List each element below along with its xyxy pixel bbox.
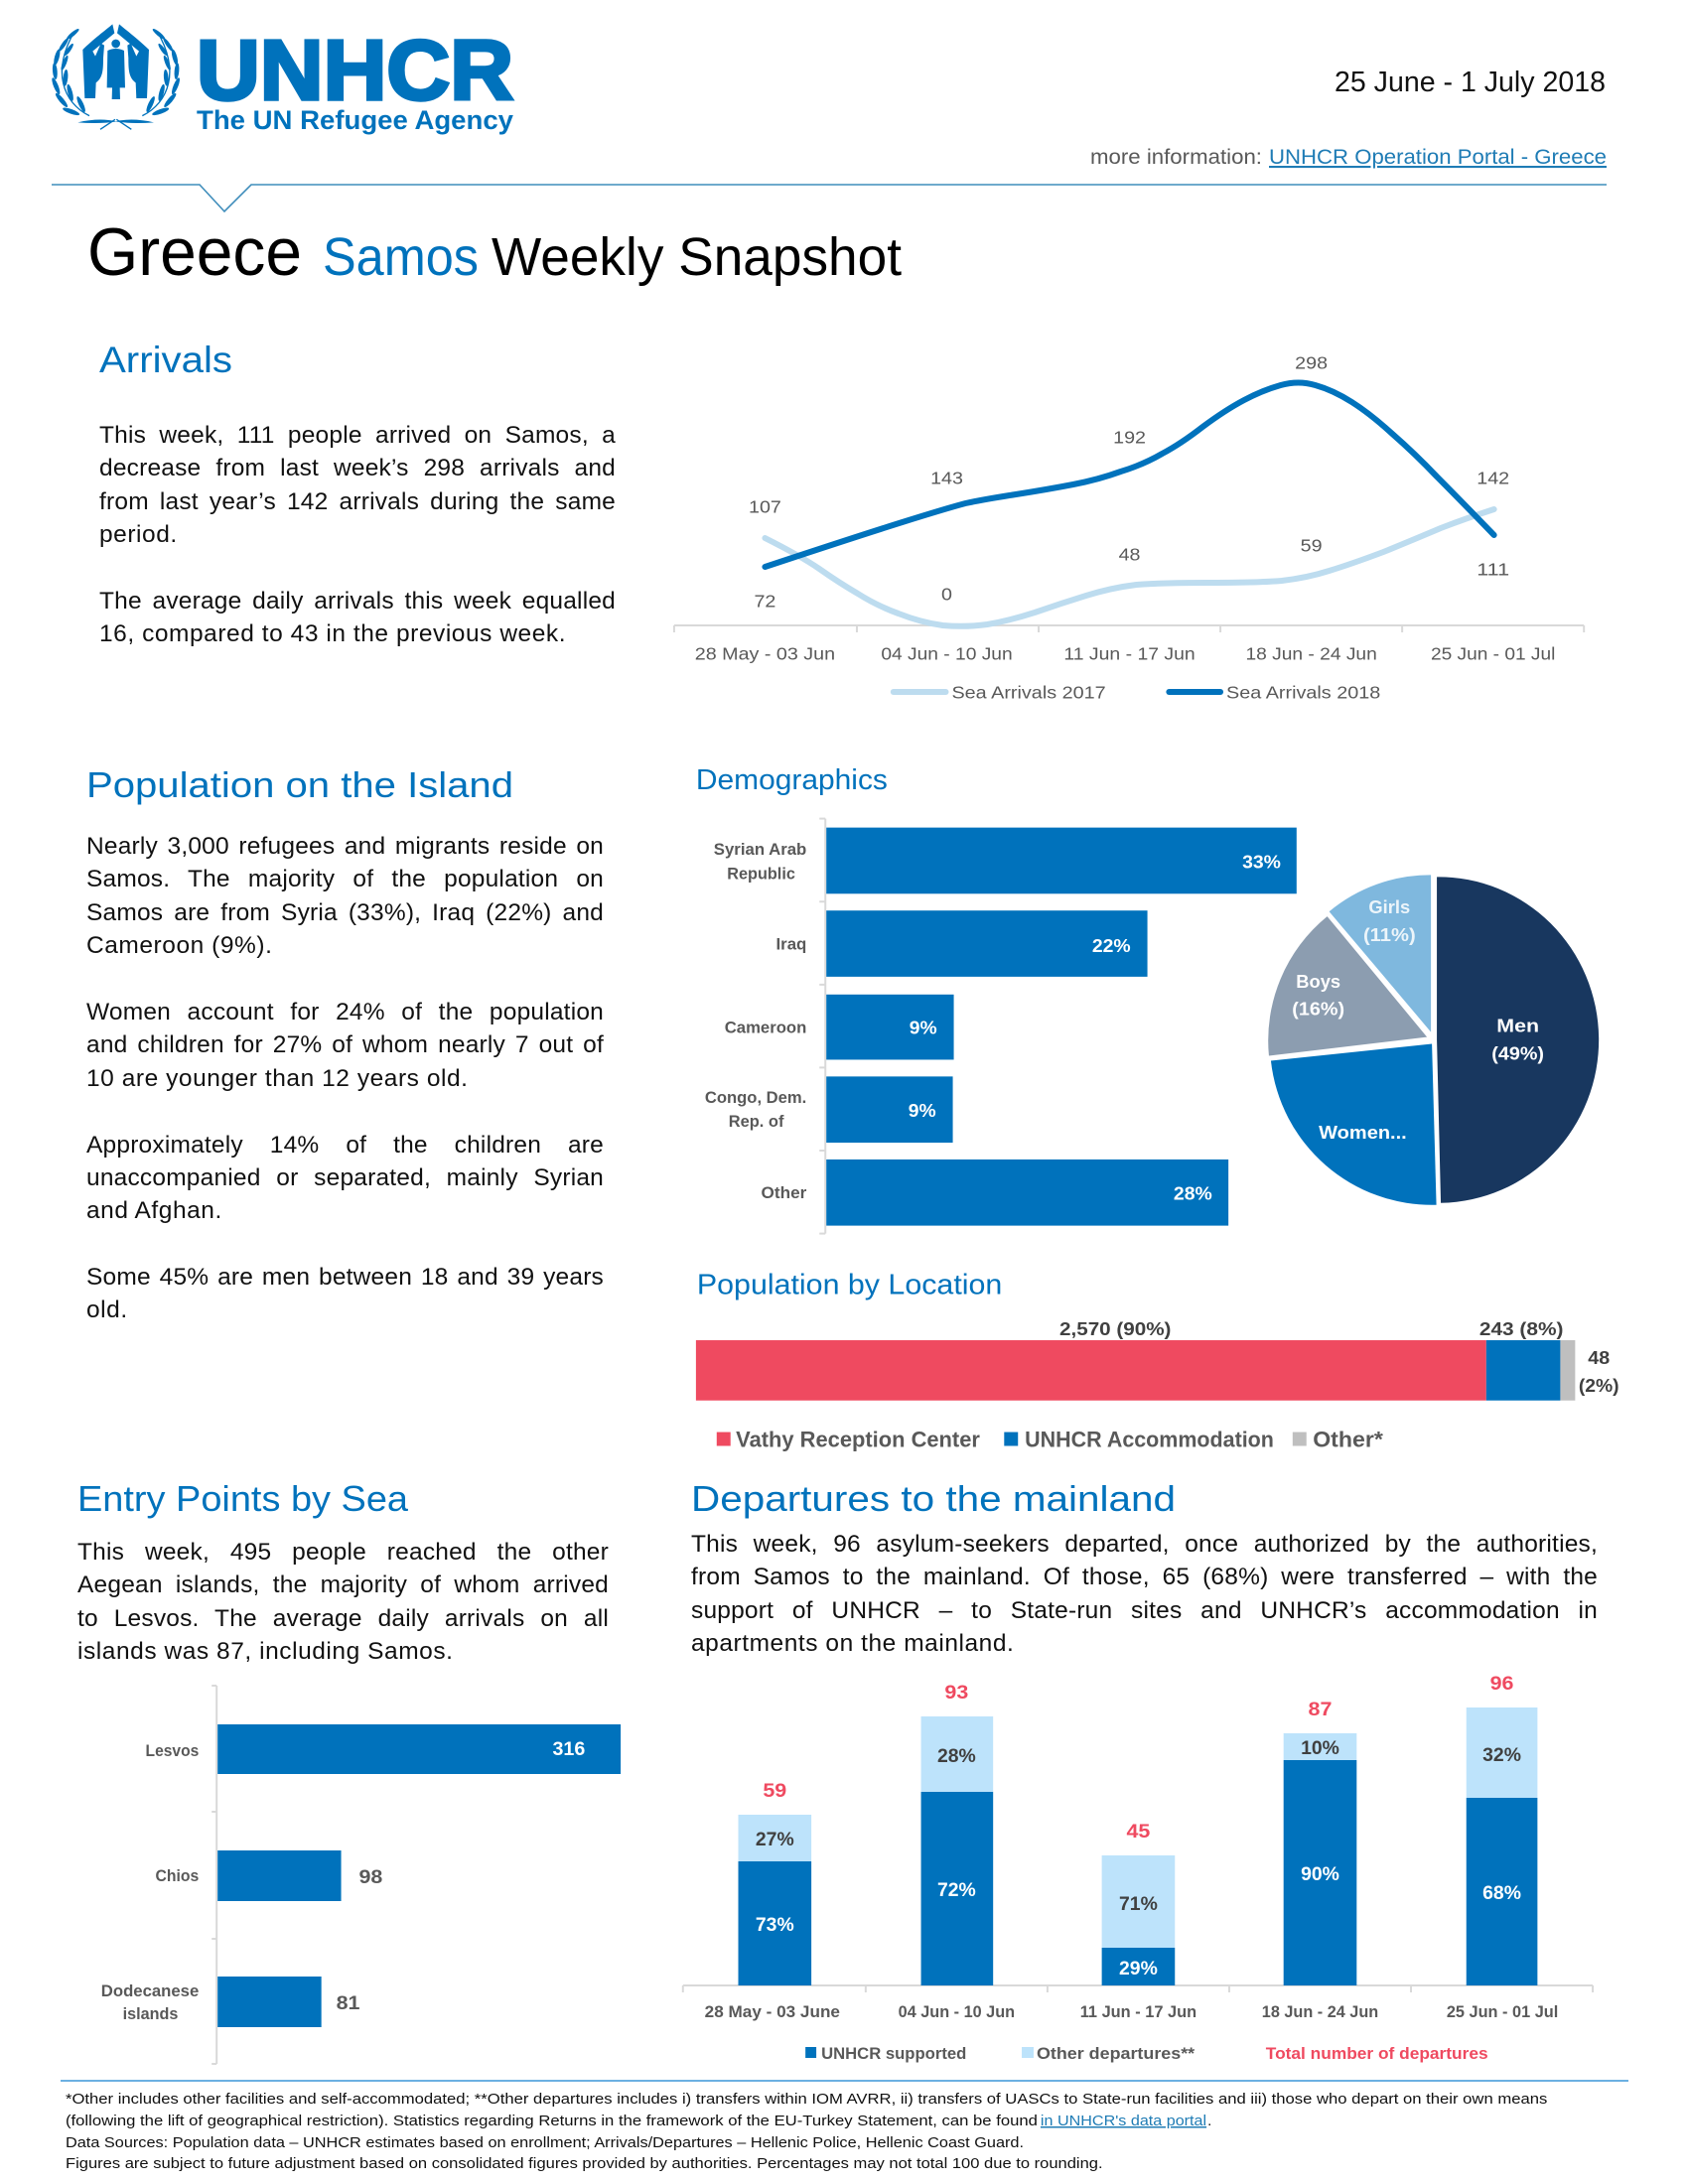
category labels: Congo, Dem. <box>705 1088 806 1107</box>
wedge: Boys <box>1268 916 1427 1055</box>
more information link <box>1090 146 1607 169</box>
value labels <box>337 1739 585 2014</box>
bar chart: entry points <box>101 1686 621 2064</box>
stacked column chart: departures <box>683 1674 1593 2063</box>
stacked bar labels: 2,570 (90%) <box>1059 1319 1171 1340</box>
category labels: Iraq <box>775 935 806 954</box>
logo tagline: The UN Refugee Agency <box>197 105 513 135</box>
footnotes: Figures are subject to future adjustment based on consolidated figures provided by authorities. Percentages may not total 100 due to rounding. <box>66 2155 1103 2172</box>
totals: 45 <box>1126 1822 1150 1843</box>
pie labels: Men <box>1496 1017 1539 1037</box>
totals <box>763 1674 1513 1843</box>
island labels: Dodecanese <box>101 1981 199 2000</box>
bar chart: nationality <box>705 819 1297 1234</box>
pie labels: Women... <box>1319 1123 1407 1144</box>
legend: Total number of departures <box>1266 2044 1488 2063</box>
title: Weekly Snapshot <box>492 227 902 287</box>
legend: UNHCR supported <box>821 2044 966 2063</box>
category labels: Syrian Arab <box>714 840 806 859</box>
other departures columns <box>739 1707 1537 1948</box>
value labels <box>909 852 1281 1205</box>
data labels: 72 <box>754 591 775 612</box>
data labels: 59 <box>1301 535 1323 556</box>
wedge: Men <box>1437 877 1599 1203</box>
x-axis labels: 28 May - 03 Jun <box>695 643 835 664</box>
data labels <box>749 352 1509 612</box>
x-axis labels: 28 May - 03 June <box>705 2003 840 2021</box>
text block: population on the island: unaccompanied or separated, mainly Syrian <box>86 1164 604 1191</box>
totals: 59 <box>763 1781 786 1802</box>
value labels: 33% <box>1242 852 1281 873</box>
title: Greece <box>87 214 302 290</box>
value labels: 81 <box>337 1993 359 2014</box>
text block: population on the island: old. <box>86 1297 128 1323</box>
legend <box>805 2044 1488 2063</box>
text block: population on the island: and Afghan. <box>86 1197 222 1224</box>
UNHCR supported columns <box>739 1760 1537 1985</box>
text block: population on the island: Samos are from Syria (33%), Iraq (22%) and <box>86 899 604 926</box>
percentage labels: 28% <box>937 1746 976 1767</box>
heading: Departures to the mainland: Departures to the mainland <box>691 1478 1176 1519</box>
data labels: 107 <box>749 496 781 517</box>
legend: Other departures** <box>1037 2044 1196 2063</box>
heading: Entry Points by Sea: Entry Points by Sea <box>77 1478 409 1519</box>
text block: entry points: to Lesvos. The average daily arrivals on all <box>77 1605 609 1632</box>
x-axis labels: 04 Jun - 10 Jun <box>899 2003 1015 2021</box>
series: Sea Arrivals 2017 <box>765 509 1494 626</box>
text block: population on the island: 10 are younger than 12 years old. <box>86 1065 469 1092</box>
logo: UNHCR <box>51 24 513 135</box>
footnotes: . <box>1207 2113 1211 2129</box>
pie labels: (11%) <box>1363 925 1416 946</box>
legend: Vathy Reception Center <box>736 1427 980 1451</box>
text block: departures: This week, 96 asylum-seekers departed, once authorized by the authorities, <box>691 1531 1598 1558</box>
percentage labels: 90% <box>1301 1864 1339 1885</box>
text block: entry points <box>77 1539 609 1665</box>
x-axis labels <box>705 2003 1558 2021</box>
percentage labels: 32% <box>1482 1745 1521 1766</box>
category labels: Rep. of <box>729 1112 784 1131</box>
text block: entry points: This week, 495 people reached the other <box>77 1539 609 1566</box>
data labels: 142 <box>1477 468 1509 488</box>
category labels <box>705 840 807 1202</box>
text block: departures: from Samos to the mainland. Of those, 65 (68%) were transferred – with the <box>691 1564 1598 1590</box>
text block: arrivals: The average daily arrivals this week equalled <box>99 588 616 614</box>
text block: departures <box>691 1531 1598 1657</box>
percentage labels <box>756 1738 1521 1979</box>
pie labels <box>1292 897 1544 1144</box>
x-axis labels: 25 Jun - 01 Jul <box>1447 2003 1558 2021</box>
footnotes: in UNHCR's data portal <box>1041 2113 1206 2129</box>
legend: Sea Arrivals 2018 <box>1226 682 1380 703</box>
value labels: 28% <box>1174 1184 1212 1205</box>
x-axis labels: 18 Jun - 24 Jun <box>1262 2003 1378 2021</box>
text block: arrivals: decrease from last week’s 298 arrivals and <box>99 455 616 481</box>
wedge: Girls <box>1330 875 1431 1032</box>
pie chart: sex and age <box>1268 875 1599 1205</box>
value labels: 22% <box>1092 936 1131 957</box>
title: Samos <box>323 227 479 287</box>
text block: population on the island: Cameroon (9%). <box>86 932 272 959</box>
text block: population on the island: and children for 27% of whom nearly 7 out of <box>86 1031 604 1058</box>
text block: arrivals <box>99 422 616 647</box>
text block: entry points: Aegean islands, the majority of whom arrived <box>77 1571 609 1598</box>
island labels: islands <box>123 2004 178 2023</box>
text block: entry points: islands was 87, including Samos. <box>77 1638 453 1665</box>
x-axis labels: 04 Jun - 10 Jun <box>881 643 1013 664</box>
island labels: Lesvos <box>146 1741 199 1760</box>
legend <box>717 1427 1383 1451</box>
data labels: 0 <box>941 584 952 605</box>
totals: 96 <box>1490 1674 1513 1695</box>
more information link: UNHCR Operation Portal - Greece <box>1269 146 1607 169</box>
stacked bar labels: 243 (8%) <box>1479 1319 1563 1340</box>
icon: UNHCR emblem with laurel wreath and sheltering hands <box>51 24 182 129</box>
text block: population on the island <box>86 833 604 1323</box>
text block: population on the island: Samos. The majority of the population on <box>86 866 604 892</box>
legend <box>894 682 1380 703</box>
line chart: sea arrivals 2017 vs 2018 <box>674 352 1584 703</box>
percentage labels: 72% <box>937 1880 976 1901</box>
legend: Sea Arrivals 2017 <box>951 682 1106 703</box>
stacked bar labels: 48 <box>1588 1348 1610 1369</box>
value labels: 9% <box>910 1019 937 1039</box>
percentage labels: 71% <box>1119 1894 1158 1915</box>
percentage labels: 27% <box>756 1830 794 1850</box>
stacked bar: population by location <box>696 1319 1619 1451</box>
title <box>87 214 902 290</box>
text block: population on the island: Women account for 24% of the population <box>86 999 604 1025</box>
data labels: 298 <box>1295 352 1328 373</box>
date range: 25 June - 1 July 2018 <box>1335 67 1606 98</box>
footnotes <box>66 2091 1547 2172</box>
pie labels: Girls <box>1368 897 1410 918</box>
text block: arrivals: from last year’s 142 arrivals during the same <box>99 488 616 515</box>
stacked bar labels: (2%) <box>1579 1376 1619 1397</box>
pie labels: (16%) <box>1292 1000 1344 1021</box>
data labels: 192 <box>1113 427 1146 448</box>
value labels: 9% <box>909 1101 936 1122</box>
totals: 93 <box>944 1683 968 1704</box>
series: Sea Arrivals 2018 <box>765 383 1494 567</box>
x-axis labels <box>695 643 1555 664</box>
legend: UNHCR Accommodation <box>1025 1427 1274 1451</box>
bars <box>826 828 1297 1226</box>
percentage labels: 73% <box>756 1915 794 1936</box>
pie labels: (49%) <box>1491 1043 1544 1064</box>
bars <box>217 1724 621 2027</box>
text block: arrivals: period. <box>99 521 178 548</box>
value labels: 98 <box>358 1867 382 1888</box>
category labels: Other <box>762 1183 807 1202</box>
island labels <box>101 1741 199 2023</box>
heading: Population on the Island: Population on the Island <box>86 764 513 805</box>
category labels: Republic <box>727 864 795 883</box>
percentage labels: 68% <box>1482 1883 1521 1904</box>
text block: arrivals: This week, 111 people arrived on Samos, a <box>99 422 616 449</box>
x-axis labels: 25 Jun - 01 Jul <box>1431 643 1555 664</box>
data labels: 143 <box>930 468 963 488</box>
wedge: Women <box>1271 1044 1437 1205</box>
island labels: Chios <box>156 1866 199 1885</box>
text block: departures: support of UNHCR – to State-run sites and UNHCR’s accommodation in <box>691 1597 1598 1624</box>
text block: population on the island: Some 45% are men between 18 and 39 years <box>86 1264 604 1291</box>
footnotes: (following the lift of geographical restriction). Statistics regarding Returns in the framework of the EU-Turkey Statement, can be found <box>66 2113 1038 2129</box>
x-axis labels: 11 Jun - 17 Jun <box>1063 643 1196 664</box>
logo wordmark: UNHCR <box>197 24 513 118</box>
text block: population on the island: Approximately 14% of the children are <box>86 1132 604 1159</box>
category labels: Cameroon <box>725 1019 806 1037</box>
x-axis labels: 11 Jun - 17 Jun <box>1080 2003 1196 2021</box>
text block: arrivals: 16, compared to 43 in the previous week. <box>99 620 566 647</box>
heading: Arrivals: Arrivals <box>99 340 232 380</box>
text block: population on the island: Nearly 3,000 refugees and migrants reside on <box>86 833 604 860</box>
legend: Other* <box>1313 1427 1383 1451</box>
footnotes: *Other includes other facilities and self-accommodated; **Other departures includes i) transfers within IOM AVRR, ii) transfers of UASCs to State-run facilities and iii) those who depart on their own means <box>66 2091 1547 2108</box>
percentage labels: 29% <box>1119 1959 1158 1979</box>
footnotes: Data Sources: Population data – UNHCR estimates based on enrollment; Arrivals/Departures – Hellenic Police, Hellenic Coast Guard. <box>66 2134 1024 2151</box>
heading: Population by Location: Population by Location <box>697 1269 1002 1300</box>
more information link: more information: <box>1090 146 1262 169</box>
value labels: 316 <box>552 1739 585 1760</box>
totals: 87 <box>1309 1700 1332 1720</box>
pie labels: Boys <box>1296 972 1340 993</box>
data labels: 48 <box>1119 544 1141 565</box>
x-axis labels: 18 Jun - 24 Jun <box>1245 643 1377 664</box>
percentage labels: 10% <box>1301 1738 1339 1759</box>
text block: departures: apartments on the mainland. <box>691 1630 1014 1657</box>
data labels: 111 <box>1477 559 1509 580</box>
stacked bar labels <box>1059 1319 1619 1397</box>
heading: Demographics: Demographics <box>696 764 888 796</box>
